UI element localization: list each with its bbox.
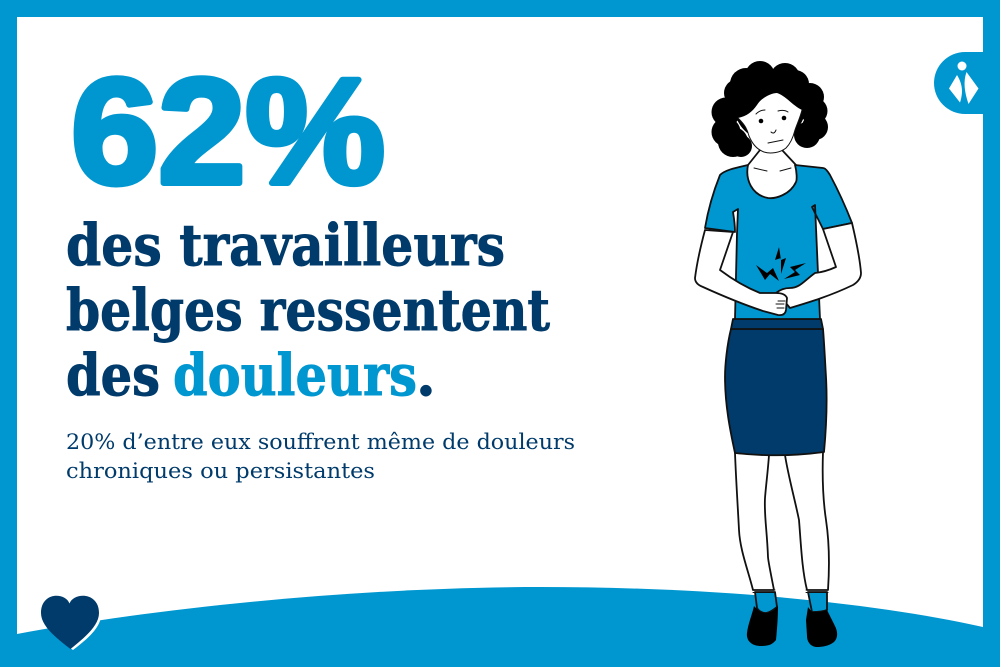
subtext: chroniques ou persistantes bbox=[66, 459, 375, 484]
neck lines bbox=[754, 168, 791, 171]
shoes bbox=[747, 606, 837, 647]
bottom blue wave bbox=[17, 587, 983, 667]
subtext bbox=[66, 430, 575, 484]
t-shirt bbox=[705, 165, 852, 319]
woman illustration bbox=[695, 61, 861, 647]
skirt bbox=[725, 319, 827, 455]
heading: . bbox=[416, 342, 436, 409]
heading bbox=[66, 212, 551, 409]
neck bbox=[748, 150, 796, 165]
pain bolts bbox=[756, 247, 806, 281]
heading: des travailleurs bbox=[66, 212, 505, 279]
legs bbox=[735, 452, 829, 590]
socks bbox=[753, 590, 828, 613]
hair bbox=[712, 61, 828, 157]
big percentage: 62% bbox=[71, 47, 385, 215]
right arm bbox=[776, 223, 861, 308]
face bbox=[738, 93, 802, 153]
heart icon bbox=[41, 596, 101, 650]
left arm bbox=[695, 230, 787, 315]
heading: des bbox=[66, 342, 160, 409]
heading: douleurs bbox=[173, 342, 417, 409]
heading: belges ressentent bbox=[66, 277, 551, 344]
fingers bbox=[776, 301, 785, 308]
logo badge bbox=[934, 52, 983, 114]
subtext: 20% d’entre eux souffrent même de douleurs bbox=[66, 430, 575, 455]
